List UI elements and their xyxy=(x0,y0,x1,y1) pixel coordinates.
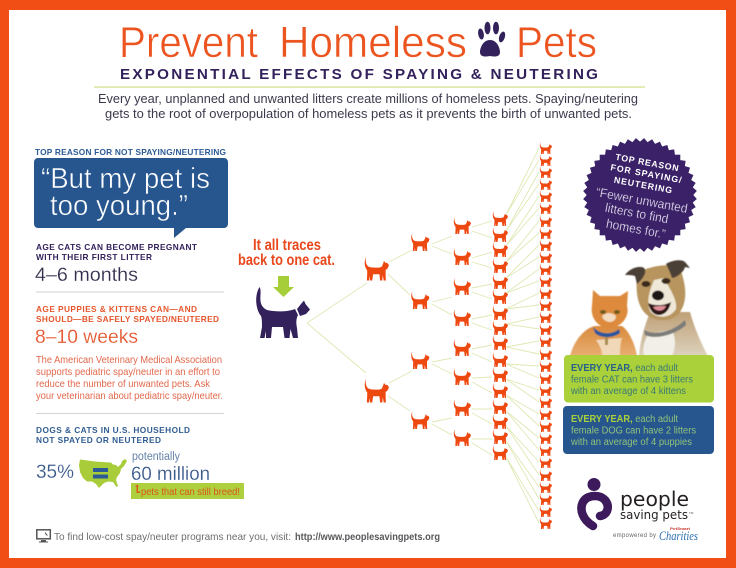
callout: pets that can still breed: pets that can still breed! xyxy=(141,487,240,498)
intro paragraph xyxy=(98,91,638,121)
heading: unspayed household pets: NOT SPAYED OR NEUTERED xyxy=(36,435,161,445)
fifth generation cats xyxy=(540,142,552,529)
logo: people saving pets: TM xyxy=(689,511,694,515)
logo: people saving pets xyxy=(581,478,698,543)
icon: paw print xyxy=(477,22,506,57)
speech bubble xyxy=(34,158,228,238)
panel: dog litter fact: EVERY YEAR, each adult xyxy=(571,414,678,425)
logo: people saving pets: empowered by xyxy=(613,533,656,539)
starburst badge: FOR SPAYING/ xyxy=(610,162,683,185)
logo: people saving pets: PetSmart xyxy=(670,526,691,531)
starburst badge: TOP REASON xyxy=(615,152,679,173)
stat: 60 million: potentially xyxy=(132,451,180,463)
icon: purple origin cat xyxy=(256,287,310,338)
arrow: green down arrow xyxy=(273,276,294,297)
title: Homeless xyxy=(279,19,467,67)
callout: it all traces back: back to one cat. xyxy=(238,252,335,269)
first generation cats xyxy=(365,256,389,402)
speech bubble: “But my pet is xyxy=(41,163,210,195)
stat: spay age: SHOULD—BE SAFELY SPAYED/NEUTERED xyxy=(36,314,219,324)
stat: 35 percent: 35% xyxy=(36,461,74,483)
stat: 60 million xyxy=(131,451,210,485)
second generation cats xyxy=(411,233,430,429)
footer link: http://www.peoplesavingpets.org xyxy=(295,532,440,543)
footer link: To find low-cost spay/neuter programs near you, visit: xyxy=(54,532,291,543)
icon: computer monitor xyxy=(37,530,50,542)
callout: it all traces back xyxy=(238,237,335,269)
icon: US map with equals sign xyxy=(79,459,127,488)
AVMA paragraph xyxy=(36,355,223,402)
stat: spay age: AGE PUPPIES & KITTENS CAN—AND xyxy=(36,304,197,314)
callout: it all traces back: It all traces xyxy=(253,237,321,254)
photo: dog xyxy=(625,260,708,356)
heading: unspayed household pets xyxy=(36,425,190,445)
stat: pregnancy age: WITH THEIR FIRST LITTER xyxy=(36,252,152,262)
stat: pregnancy age: 4–6 months xyxy=(35,264,138,286)
panel: cat litter fact: EVERY YEAR, each adult xyxy=(571,363,678,374)
AVMA paragraph: The American Veterinary Medical Association xyxy=(36,355,222,366)
heading: top reason for not spaying: TOP REASON FOR NOT SPAYING/NEUTERING xyxy=(35,147,226,157)
stat: 60 million: 60 million xyxy=(131,463,210,485)
starburst badge: homes for.” xyxy=(605,216,667,241)
heading: unspayed household pets: DOGS & CATS IN U.S. HOUSEHOLD xyxy=(36,425,190,435)
title xyxy=(119,19,597,67)
stat: pregnancy age: AGE CATS CAN BECOME PREGNANT xyxy=(36,242,197,252)
intro paragraph: gets to the root of overpopulation of homeless pets as it prevents the birth of unwanted pets. xyxy=(105,106,632,121)
AVMA paragraph: your veterinarian about pediatric spay/neuter. xyxy=(36,391,223,402)
third generation cats xyxy=(454,217,471,446)
stat: pregnancy age xyxy=(35,242,197,286)
fourth generation cats xyxy=(493,211,508,460)
starburst badge: NEUTERING xyxy=(613,175,673,195)
photo: cat xyxy=(570,290,637,356)
logo: people saving pets: Charities xyxy=(659,528,698,543)
AVMA paragraph: supports pediatric spay/neuter in an effort to xyxy=(36,367,220,378)
panel: dog litter fact: female DOG can have 2 litters xyxy=(571,426,696,436)
callout: pets that can still breed xyxy=(131,483,244,499)
family tree connector lines xyxy=(307,148,539,523)
speech bubble: too young.” xyxy=(50,190,188,222)
starburst badge xyxy=(583,138,697,252)
title: Prevent xyxy=(119,19,258,67)
panel: dog litter fact xyxy=(563,406,714,454)
logo: people saving pets: people xyxy=(620,487,689,511)
stat: spay age xyxy=(35,304,219,348)
title: Pets xyxy=(516,19,597,67)
logo: people saving pets: saving pets xyxy=(620,507,688,522)
stat: spay age: 8–10 weeks xyxy=(35,326,138,348)
panel: cat litter fact xyxy=(564,355,714,402)
panel: dog litter fact: with an average of 4 puppies xyxy=(570,437,692,448)
panel: cat litter fact: female CAT can have 3 litters xyxy=(571,374,693,386)
starburst badge: “Fewer unwanted xyxy=(595,184,689,216)
subtitle: EXPONENTIAL EFFECTS OF SPAYING & NEUTERING xyxy=(120,66,598,83)
footer link xyxy=(54,532,440,543)
panel: cat litter fact: with an average of 4 kittens xyxy=(570,386,686,397)
AVMA paragraph: reduce the number of unwanted pets. Ask xyxy=(36,379,211,390)
intro paragraph: Every year, unplanned and unwanted litters create millions of homeless pets. Spaying/neutering xyxy=(98,91,638,106)
starburst badge: litters to find xyxy=(604,200,670,226)
